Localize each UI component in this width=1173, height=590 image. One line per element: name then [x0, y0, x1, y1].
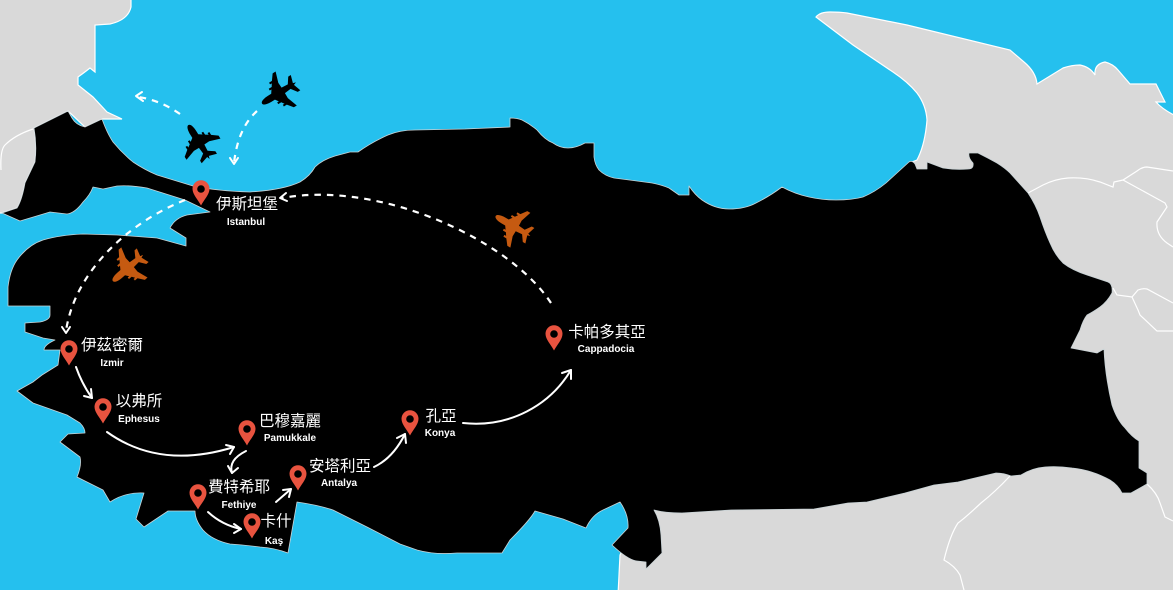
stop: Kas	[244, 512, 292, 547]
land: eastern and southern neighbours	[618, 12, 1173, 590]
stop: Pamukkale: Pamukkale	[264, 433, 317, 444]
stop: Cappadocia	[546, 323, 646, 355]
dashed arrow: Istanbul to Izmir	[62, 200, 185, 333]
stop: Kas: Kaş	[265, 536, 284, 547]
stop: Konya: 孔亞	[425, 407, 457, 425]
stop: Cappadocia: Cappadocia	[578, 344, 635, 355]
arrow: Ephesus to Pamukkale	[107, 432, 234, 456]
stop: Izmir	[60, 336, 143, 369]
arrow: Izmir to Ephesus	[76, 367, 92, 398]
arrow: Kas to Antalya	[276, 489, 291, 502]
arrow: Antalya to Konya	[374, 434, 406, 467]
dashed arrow: arrival to Istanbul	[230, 111, 257, 164]
stop: Istanbul: 伊斯坦堡	[216, 195, 278, 213]
stop: Antalya: Antalya	[321, 478, 357, 489]
country borders	[1, 129, 1173, 590]
dashed arrow: Cappadocia to Istanbul	[280, 193, 551, 303]
stop: Fethiye: 費特希耶	[208, 478, 270, 496]
Turkey silhouette	[2, 111, 1147, 569]
stop: Ephesus: Ephesus	[118, 414, 160, 425]
plane: black, departing northwest	[171, 114, 227, 170]
stop: Antalya	[290, 457, 371, 490]
stop: Konya	[402, 407, 457, 439]
stop: Fethiye: Fethiye	[221, 500, 257, 511]
stop: Istanbul	[192, 180, 278, 228]
plane: black, arriving	[251, 65, 307, 121]
stop: Izmir: 伊茲密爾	[81, 336, 143, 354]
arrow: Pamukkale to Fethiye	[228, 451, 246, 473]
plane: orange, Istanbul to Izmir	[100, 240, 156, 296]
stop: Ephesus	[94, 392, 162, 425]
dashed arrow: departure to northwest	[136, 92, 180, 114]
stop: Izmir: Izmir	[100, 358, 124, 369]
stop: Konya: Konya	[425, 428, 456, 439]
stop: Fethiye	[190, 478, 270, 511]
land: northwest neighbour	[0, 0, 131, 213]
stop: Ephesus: 以弗所	[116, 392, 162, 410]
stop: Antalya: 安塔利亞	[309, 457, 371, 475]
stop: Cappadocia: 卡帕多其亞	[568, 323, 646, 341]
stop: Kas: 卡什	[260, 512, 292, 530]
plane: orange, Cappadocia to Istanbul	[486, 199, 540, 253]
arrow: Fethiye to Kas	[208, 512, 241, 533]
arrow: Konya to Cappadocia	[463, 370, 571, 424]
stop: Istanbul: Istanbul	[227, 217, 265, 228]
stop: Pamukkale	[238, 412, 321, 446]
stop: Pamukkale: 巴穆嘉麗	[259, 412, 321, 430]
